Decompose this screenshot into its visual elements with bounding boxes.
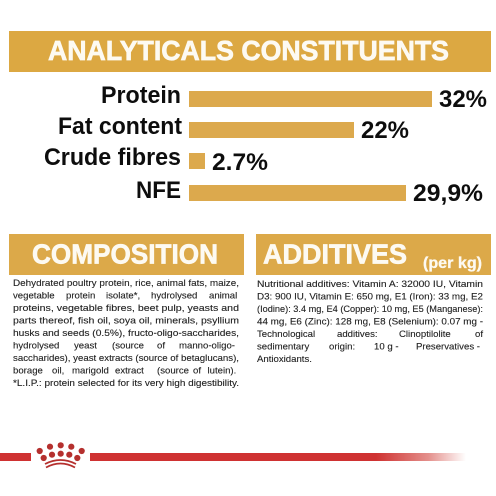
row: crude fibres: Crude fibres (44, 144, 181, 171)
heading banner: analyticals constituents: ANALYTICALS CONSTITUENTS (48, 35, 449, 66)
text block: composition: (source (112, 340, 144, 352)
text block: composition: lutein). (208, 366, 236, 376)
text block: composition: hydrolysed (151, 290, 197, 302)
row: protein (101, 82, 487, 113)
footer red line (0, 453, 466, 461)
text block: composition: vegetable (13, 290, 55, 302)
text block: additives: D3: 900 IU, Vitamin E: 650 mg, E1 (Iron): 33 mg, E2 (257, 292, 483, 302)
text block: composition: borage (13, 366, 43, 376)
text block: composition: *L.I.P.: protein selected for its very high digestibility. (13, 378, 239, 389)
heading banner: additives: (per kg) (423, 255, 482, 272)
row: protein: Protein (101, 82, 181, 109)
text block: composition: protein (66, 290, 95, 302)
text block: additives: 44 mg, E6 (Zinc): 128 mg, E8 (Selenium): 0.07 mg - (257, 316, 483, 328)
row: nfe: NFE (136, 177, 181, 204)
text block: additives: Technological (257, 329, 315, 340)
text block: composition: of (157, 340, 165, 352)
text block: additives: (Iodine): 3.4 mg, E4 (Copper): 10 mg, E5 (Manganese): (257, 304, 483, 315)
heading banner: additives (256, 234, 491, 275)
text block: composition: saccharides), yeast extracts (source of betaglucans), (13, 353, 239, 364)
text block: composition: Dehydrated poultry protein, rice, animal fats, maize, (13, 278, 239, 289)
text block: additives: Clinoptilolite (399, 329, 451, 340)
row: crude fibres: 2.7% (212, 149, 268, 176)
text block: additives: Antioxidants. (257, 354, 312, 365)
text block: additives (257, 279, 483, 365)
text block: composition: animal (209, 290, 237, 302)
row: fat content: 22% (361, 117, 409, 144)
panel: additives (256, 234, 491, 365)
row: fat content (58, 113, 409, 144)
text block: composition: proteins, vegetable fibres, beet pulp, yeasts and (13, 303, 239, 314)
text block: composition: marigold (72, 366, 109, 376)
text block: composition: yeast (74, 340, 97, 352)
row: nfe (136, 177, 483, 207)
text block: additives: origin: (329, 342, 355, 352)
row: nfe: 29,9% (413, 180, 483, 207)
text block: additives: Nutritional additives: Vitamin A: 32000 IU, Vitamin (257, 279, 483, 290)
icon: royal canin crown (37, 442, 85, 468)
text block: composition: oil, (52, 366, 64, 376)
text block: additives: sedimentary (257, 342, 309, 352)
panel: composition (9, 234, 244, 389)
heading banner: composition: COMPOSITION (32, 238, 218, 270)
text block: composition: husks and seeds (0.5%), fructo-oligo-saccharides, (13, 328, 239, 339)
bar chart (44, 82, 487, 207)
text block: composition: hydrolysed (13, 340, 59, 352)
text block: additives: of (475, 329, 483, 340)
text block: composition: (source (157, 366, 189, 376)
row: protein: 32% (439, 86, 487, 113)
panel: analyticals constituents (9, 31, 491, 207)
text block: additives: additives: (337, 329, 378, 340)
row: fat content: Fat content (58, 113, 182, 140)
heading banner: composition (9, 234, 244, 275)
text block: additives: 10 g - (374, 342, 399, 352)
text block: composition: isolate*, (106, 290, 140, 302)
heading banner: analyticals constituents (9, 31, 491, 72)
text block: composition: extract (115, 366, 144, 376)
row: crude fibres (44, 144, 268, 176)
text block: composition: of (193, 366, 201, 376)
text block: composition: manno-oligo- (179, 340, 235, 352)
text block: additives: Preservatives - (416, 342, 480, 352)
text block: composition (13, 278, 239, 389)
text block: composition: parts thereof, fish oil, soya oil, minerals, psyllium (13, 316, 239, 326)
heading banner: additives: ADDITIVES (263, 238, 407, 270)
